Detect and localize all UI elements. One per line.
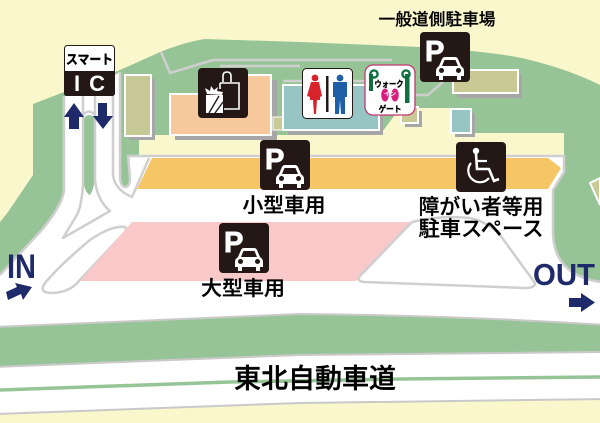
label: accessible parking: 駐車スペース: [418, 218, 544, 241]
icon: walk-in gate: [365, 65, 415, 115]
icon: large vehicle parking: [219, 223, 269, 273]
expressway carriageway: [0, 352, 600, 414]
label: accessible parking: [418, 196, 544, 241]
expressway median green: [0, 314, 600, 367]
icon: general road parking: [420, 32, 470, 82]
building: small olive: [401, 107, 422, 127]
label: general road parking: 一般道側駐車場: [378, 10, 496, 29]
arrow: up to smart IC: [64, 103, 84, 129]
building: olive left: [125, 75, 155, 140]
icon: small car parking: P: [265, 144, 284, 176]
building: orange shop: [170, 75, 277, 140]
main road surface: [0, 96, 600, 327]
smart IC ramp white strip: [113, 72, 150, 197]
traffic island: [359, 217, 535, 288]
icon: shopping: [198, 68, 248, 118]
icon: general road parking: P: [425, 36, 444, 68]
label: large vehicles: 大型車用: [201, 277, 285, 300]
building: small teal: [451, 109, 475, 137]
icon: small car parking: [260, 140, 310, 190]
label: OUT: OUT: [533, 257, 595, 292]
icon: walk-in gate: ゲート: [378, 104, 402, 114]
ramp median tongue: [83, 115, 95, 195]
icon: smart IC sign: スマート: [66, 52, 113, 67]
large vehicle parking: [80, 222, 412, 281]
icon: walk-in gate: イン: [384, 91, 396, 98]
icon: large vehicle parking: P: [224, 227, 243, 259]
arrow: down from smart IC: [93, 103, 113, 129]
label: expressway: 東北自動車道: [234, 364, 396, 394]
building: small annex: [273, 117, 283, 130]
icon: restrooms: [302, 68, 352, 118]
green landscaped area: [0, 39, 600, 300]
icon: smart IC sign: [64, 46, 115, 96]
building: olive right: [453, 70, 522, 98]
ramp and road edge lines: [0, 72, 600, 293]
service area grounds: [139, 108, 564, 157]
icon: smart IC sign: I C: [74, 71, 105, 96]
building: teal restroom: [283, 85, 383, 135]
access paths: [161, 52, 445, 95]
label: accessible parking: 障がい者等用: [418, 196, 544, 219]
right side green curve: [553, 172, 600, 282]
icon: walk-in gate: ウォーク: [374, 79, 404, 89]
arrow: IN: [6, 283, 32, 300]
label: IN: IN: [7, 248, 36, 286]
small car parking: [137, 158, 561, 189]
expressway centre line: [0, 377, 600, 390]
arrow: OUT: [569, 293, 595, 312]
label: small cars: 小型車用: [242, 194, 326, 217]
building: corner right: [590, 178, 600, 205]
icon: wheelchair parking: [456, 142, 506, 192]
